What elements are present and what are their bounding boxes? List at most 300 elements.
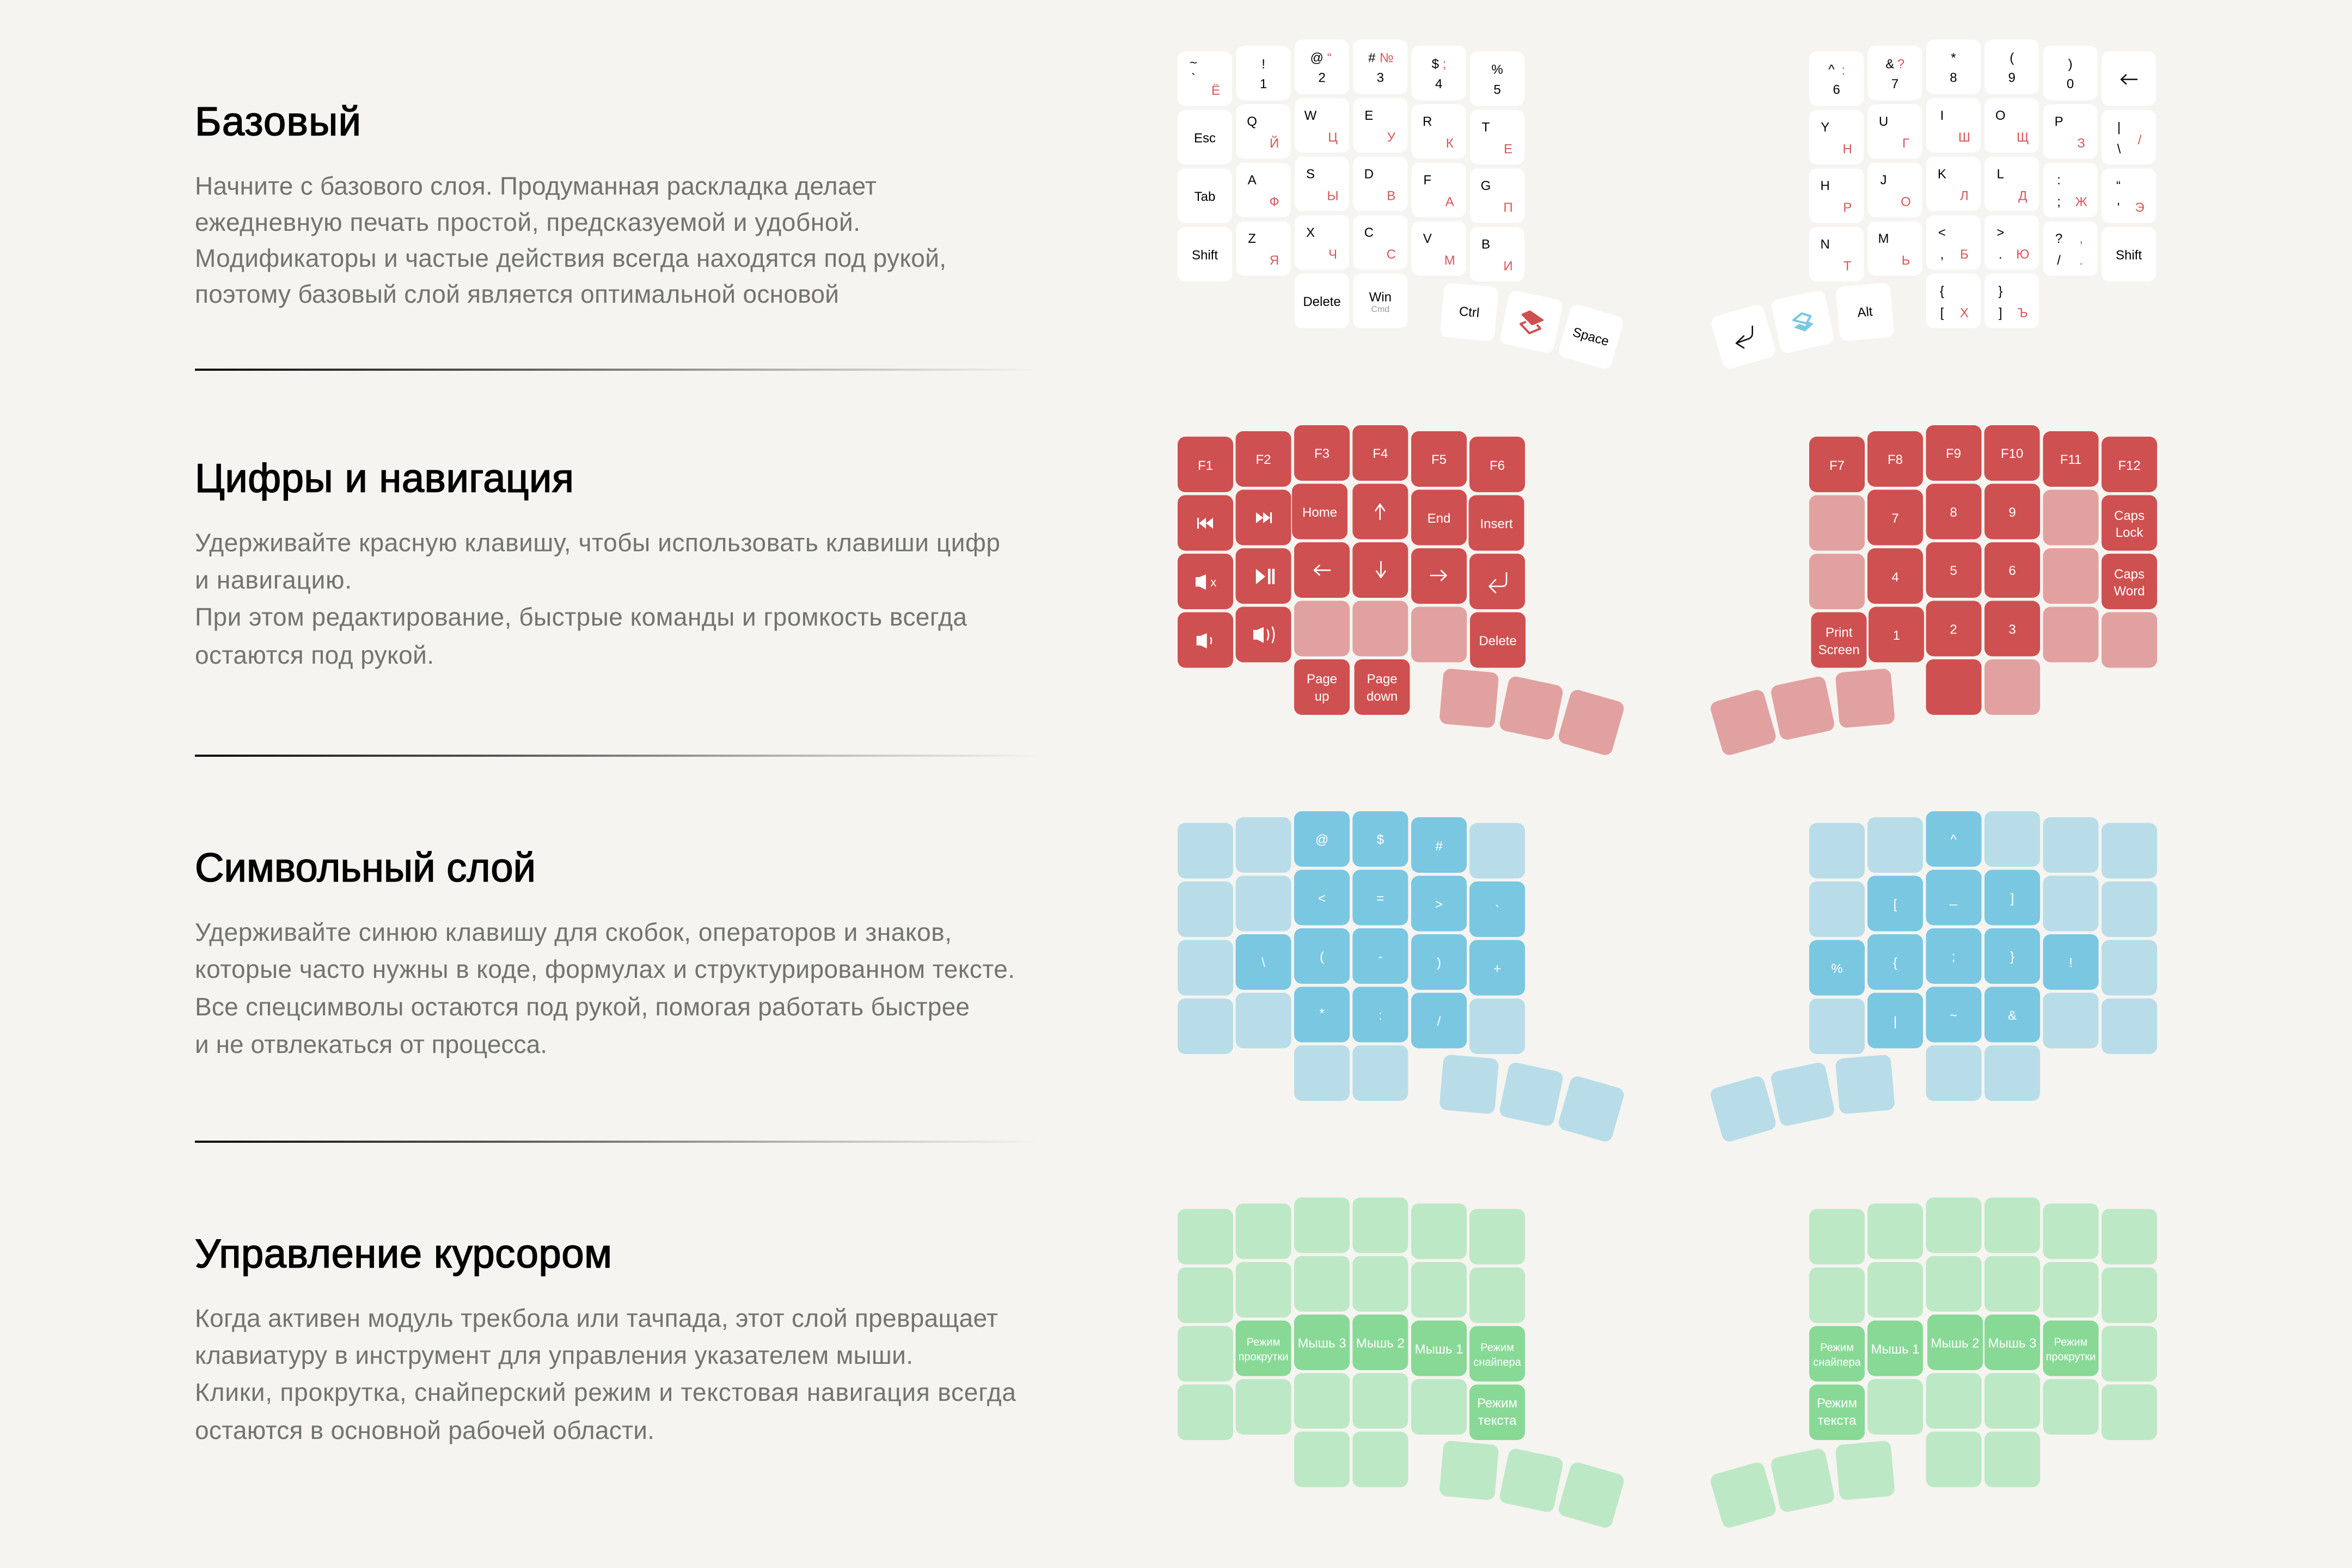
column 4 keys: D (1364, 167, 1374, 182)
key: blank active (1926, 659, 1982, 715)
key: text mode (1469, 1385, 1525, 1440)
column 2 keys: M (1878, 231, 1889, 246)
thumb key: Space (1557, 303, 1625, 370)
column 4 keys: > (1996, 225, 2004, 240)
text block: base layer: ежедневную печать простой, предсказуемой и удобной. (195, 208, 860, 236)
column 1 keys: Р (1843, 200, 1852, 215)
key: percent: % (1831, 961, 1843, 976)
column 3 keys: “ (1327, 51, 1332, 65)
key: mouse 3: Мышь 3 (1297, 1336, 1346, 1351)
column 3 keys: X (1306, 225, 1315, 240)
inactive keys: left hand (1178, 1198, 1626, 1529)
column 4 keys: С (1387, 247, 1396, 262)
key: F5 (1411, 431, 1467, 487)
key: F4: F4 (1373, 446, 1388, 461)
key: 7: 7 (1891, 511, 1899, 526)
column 2 keys: J (1881, 173, 1887, 187)
column 6 keys: П (1503, 200, 1513, 215)
key: F2: F2 (1255, 452, 1271, 467)
key: F12: F12 (2118, 458, 2141, 473)
column 4 keys (1984, 40, 2039, 328)
column 4 keys: O (1995, 108, 2006, 123)
key: close brace: } (2010, 950, 2014, 964)
key: sniper mode (1809, 1326, 1865, 1382)
column 2 keys: 1 (1260, 77, 1267, 91)
key: semicolon: ; (1952, 950, 1955, 964)
column 2 keys: U (1879, 114, 1888, 129)
column 2 keys: Й (1270, 136, 1279, 151)
key: colon: : (1379, 1008, 1382, 1023)
text block: symbol layer: Все спецсимволы остаются под рукой, помогая работать быстрее (195, 993, 970, 1021)
key: sniper mode: Режим (1820, 1342, 1854, 1353)
key: ampersand: & (2008, 1008, 2017, 1023)
column 5 keys: ? (2055, 231, 2062, 246)
key: caret (1926, 811, 1982, 867)
key: close parenthesis (1411, 934, 1467, 990)
key: Page up: up (1315, 689, 1329, 704)
key: open bracket: [ (1894, 897, 1897, 912)
text block: cursor layer: клавиатуру в инструмент для управления указателем мыши. (195, 1341, 913, 1369)
key: F9 (1926, 425, 1982, 481)
key: text mode: Режим (1817, 1396, 1857, 1411)
column 3 keys: Л (1960, 188, 1969, 204)
column 3 keys: K (1938, 167, 1946, 182)
key: close bracket (1984, 870, 2040, 926)
key: 6: 6 (2008, 564, 2016, 578)
column 4 keys: E (1364, 108, 1373, 123)
column 3 keys: Б (1960, 247, 1969, 262)
key: F12 (2102, 437, 2157, 492)
key: caret: ^ (1950, 832, 1957, 847)
column 4 keys: # (1368, 51, 1376, 65)
text block: number layer: и навигацию. (195, 566, 352, 594)
column 5 keys: / (2057, 253, 2061, 268)
heading: Управление курсором: Управление курсором (195, 1231, 612, 1276)
key: colon (1352, 987, 1408, 1042)
key: F5: F5 (1431, 452, 1447, 467)
column 5 keys (2043, 46, 2098, 275)
column 6 keys: T (1482, 120, 1490, 135)
key: 1: 1 (1893, 628, 1900, 643)
column 2 keys: 7 (1891, 77, 1898, 91)
key: less than (1294, 870, 1350, 926)
key: Caps Word: Caps (2114, 567, 2145, 582)
key: open brace: { (1893, 955, 1897, 970)
column 4 keys: . (1999, 247, 2002, 262)
key: F1: F1 (1198, 458, 1213, 473)
text block: symbol layer (195, 918, 1015, 1058)
key: Caps Lock: Caps (2114, 509, 2145, 523)
column 5 keys: R (1423, 114, 1432, 129)
key: F8 (1867, 431, 1923, 487)
column 6 keys: Shift (2116, 248, 2142, 262)
keyboard: symbol layer right hand (1709, 811, 2157, 1143)
column 5 keys: V (1423, 231, 1432, 246)
icon key: left arrow (1294, 542, 1350, 598)
column 5 keys: З (2077, 136, 2085, 151)
key: F9: F9 (1946, 446, 1961, 461)
column 3 keys: I (1940, 108, 1944, 123)
key: Page down: down (1367, 689, 1398, 704)
key: text mode (1809, 1385, 1865, 1440)
text block: base layer: Модификаторы и частые действия всегда находятся под рукой, (195, 244, 946, 272)
key: backtick (1469, 881, 1525, 937)
column 5 keys: . (2079, 253, 2083, 268)
key: F11: F11 (2060, 452, 2081, 467)
column 4 keys: C (1364, 225, 1374, 240)
column 5 keys: , (2079, 231, 2083, 246)
column 1 keys: ~ (1190, 56, 1197, 70)
column 1 keys: Ё (1211, 83, 1220, 98)
key: less than: < (1318, 891, 1326, 906)
icon key: right arrow (1411, 548, 1467, 604)
key: hyphen (1352, 928, 1408, 984)
column 5 keys: К (1446, 136, 1454, 151)
text block: number layer: остаются под рукой. (195, 641, 434, 669)
key: End (1411, 490, 1467, 546)
key: Page up: Page (1307, 672, 1337, 687)
text block: number layer (195, 528, 1000, 669)
column 2 keys: & (1885, 57, 1894, 72)
key: backtick: ` (1495, 903, 1499, 918)
column 2 keys: A (1248, 173, 1257, 187)
key: asterisk (1294, 987, 1350, 1042)
key: Caps Lock (2102, 495, 2157, 551)
column 6 keys: 5 (1493, 83, 1501, 97)
column 1 keys (1809, 51, 1864, 281)
key: ampersand (1984, 987, 2040, 1042)
column 5 keys: ) (2068, 57, 2073, 72)
thumb key: Enter arrow (1710, 303, 1777, 370)
column 6 keys: B (1481, 237, 1490, 252)
column 4 keys: 9 (2008, 71, 2016, 85)
key: close bracket: ] (2011, 891, 2014, 906)
icon key: next track (1236, 490, 1291, 546)
column 2 keys: Ф (1269, 195, 1279, 209)
key: sniper mode: Режим (1480, 1342, 1514, 1353)
column 3 keys: 8 (1950, 71, 1957, 85)
key: sniper mode: снайпера (1813, 1357, 1861, 1369)
key: F6: F6 (1490, 458, 1505, 473)
key: mouse 1: Мышь 1 (1414, 1342, 1463, 1357)
column 4 keys: } (1998, 284, 2002, 298)
column 5 keys: F (1423, 173, 1431, 187)
text block: cursor layer: Клики, прокрутка, снайперский режим и текстовая навигация всегда (195, 1378, 1016, 1406)
inactive keys: right hand (1809, 490, 2157, 715)
key: F4 (1352, 425, 1408, 481)
key: End: End (1428, 511, 1450, 526)
column 2 keys: О (1901, 195, 1911, 209)
key: Caps Word (2102, 554, 2157, 609)
inactive keys: right hand (1709, 811, 2157, 1143)
key: F11 (2043, 431, 2098, 487)
column 5 keys: $ (1432, 57, 1439, 72)
column 6 keys: / (2138, 133, 2142, 148)
column 3 keys: { (1940, 284, 1944, 298)
key: Page down: Page (1367, 672, 1398, 687)
key: open brace (1867, 934, 1923, 990)
panel: base layer description (195, 99, 946, 308)
key: open parenthesis: ( (1320, 950, 1324, 964)
key: F7: F7 (1829, 458, 1845, 473)
key: scroll mode: прокрутки (2046, 1351, 2096, 1363)
key: mouse 3 (1984, 1314, 2040, 1370)
key: mouse 2 (1352, 1314, 1408, 1370)
key: Insert: Insert (1480, 517, 1513, 531)
column 4 keys: 3 (1377, 71, 1384, 85)
key: slash: / (1437, 1014, 1441, 1029)
key: hash: # (1435, 839, 1443, 854)
key: mouse 1 (1867, 1321, 1923, 1376)
column 5 keys: : (2057, 173, 2061, 187)
panel: number and navigation layer description (195, 455, 1000, 669)
column 6 keys (1470, 51, 1524, 281)
text block: base layer (195, 172, 946, 308)
column 4 keys: Win (1369, 290, 1392, 305)
column 4 keys: ( (2010, 51, 2014, 65)
column 4 keys: ] (1999, 306, 2002, 320)
thumb key: red layer switch icon (1499, 290, 1564, 354)
column 5 keys (1412, 46, 1466, 275)
key: Home (1292, 483, 1347, 539)
column 3 keys: S (1306, 167, 1315, 182)
column 3 keys: Ш (1958, 130, 1970, 145)
icon key: mute: x (1210, 575, 1216, 589)
key: Delete: Delete (1479, 634, 1517, 648)
key: mouse 2 (1927, 1314, 1983, 1370)
key: dollar: $ (1377, 832, 1384, 847)
key: 8 (1926, 483, 1982, 539)
key: equals (1352, 870, 1408, 926)
key: 4: 4 (1891, 570, 1899, 585)
panel: symbol layer description (195, 845, 1015, 1058)
key: sniper mode (1469, 1326, 1525, 1382)
keyboard: cursor layer left hand (1178, 1198, 1626, 1529)
column 5 keys: 0 (2067, 77, 2074, 91)
key: scroll mode: Режим (1247, 1336, 1280, 1348)
column 2 keys (1867, 46, 1922, 275)
inactive keys: left hand (1178, 817, 1626, 1143)
key: plus (1469, 940, 1525, 995)
column 6 keys: | (2117, 120, 2121, 135)
keyboard: base layer left hand (1178, 40, 1625, 370)
key: hash (1411, 817, 1467, 873)
column 3 keys: Ч (1328, 247, 1337, 262)
key: mouse 2: Мышь 2 (1931, 1336, 1980, 1351)
thumb key: Ctrl (1440, 283, 1499, 341)
key: Print Screen: Print (1826, 626, 1853, 640)
key: Home: Home (1302, 505, 1337, 520)
column 2 keys: Ь (1902, 253, 1910, 268)
column 5 keys: ; (1443, 57, 1446, 72)
key: hyphen: - (1378, 950, 1382, 964)
column 1 keys: Tab (1195, 189, 1215, 204)
column 3 keys: @ (1310, 51, 1324, 65)
key: F6 (1469, 437, 1525, 492)
column 2 keys: Z (1248, 231, 1256, 246)
column 4 keys: У (1387, 130, 1396, 145)
column 6 keys: Э (2135, 200, 2145, 215)
column 1 keys: Y (1821, 120, 1829, 135)
key: scroll mode: прокрутки (1239, 1351, 1288, 1363)
text block: cursor layer: остаются в основной рабочей области. (195, 1416, 654, 1444)
column 1 keys: ^ (1828, 62, 1835, 77)
inactive keys: right hand (1709, 1198, 2157, 1529)
icon key: volume down (1178, 612, 1233, 667)
column 1 keys: : (1841, 63, 1845, 78)
key: F2 (1236, 431, 1291, 487)
key: 3: 3 (2008, 622, 2016, 637)
key: underscore: _ (1949, 891, 1957, 906)
key: semicolon (1926, 928, 1982, 984)
keyboard: cursor layer right hand (1709, 1198, 2157, 1529)
key: Print Screen: Screen (1818, 642, 1860, 658)
column 4 keys: Cmd (1371, 305, 1389, 314)
key: F10: F10 (2001, 446, 2023, 461)
text block: cursor layer (195, 1304, 1016, 1444)
key: Print Screen (1811, 612, 1866, 667)
heading: Цифры и навигация: Цифры и навигация (195, 455, 574, 501)
column 6 keys (2102, 51, 2156, 281)
column 4 keys (1353, 40, 1407, 328)
inactive thumb keys: left hand (1439, 668, 1626, 757)
icon key: up arrow (1352, 483, 1408, 539)
column 4 keys: Ю (2016, 247, 2029, 262)
key: Page down (1355, 659, 1410, 715)
column 1 keys (1178, 51, 1232, 281)
key: Page up (1294, 659, 1350, 715)
key: 8: 8 (1950, 505, 1957, 520)
column 5 keys: М (1444, 253, 1455, 268)
text block: symbol layer: и не отвлекаться от процесса. (195, 1030, 547, 1058)
key: F8: F8 (1888, 452, 1903, 467)
column 3 keys: Ы (1327, 188, 1339, 204)
key: greater than: > (1435, 897, 1443, 912)
column 2 keys: Я (1270, 253, 1279, 268)
thumb key: blue layer switch icon (1771, 290, 1835, 354)
icon key: previous track (1178, 495, 1233, 551)
column 6 keys: % (1491, 62, 1503, 77)
key: backslash: \ (1261, 955, 1265, 970)
key: F10 (1984, 425, 2039, 481)
column 2 keys: Q (1247, 114, 1257, 129)
column 3 keys (1295, 40, 1349, 328)
text block: base layer: Начните с базового слоя. Продуманная раскладка делает (195, 172, 877, 200)
key: exclamation mark (2043, 934, 2098, 990)
key: scroll mode (2043, 1321, 2098, 1376)
column 1 keys: Esc (1194, 131, 1216, 146)
key: text mode: текста (1818, 1413, 1857, 1428)
key: mouse 3 (1294, 1314, 1350, 1370)
column 5 keys: P (2055, 114, 2063, 129)
key: open parenthesis (1294, 928, 1350, 984)
column 6 keys: G (1481, 179, 1491, 193)
keyboard: base layer right hand (1710, 40, 2156, 370)
icon key: down arrow (1352, 542, 1408, 598)
text block: symbol layer: которые часто нужны в коде, формулах и структурированном тексте. (195, 955, 1015, 983)
column 4 keys: Д (2018, 188, 2027, 204)
column 3 keys: 2 (1318, 71, 1326, 85)
key: underscore (1926, 870, 1982, 926)
inactive keys: left hand (1294, 601, 1467, 662)
column 3 keys (1926, 40, 1981, 328)
text block: number layer: При этом редактирование, быстрые команды и громкость всегда (195, 603, 967, 631)
column 6 keys: И (1503, 259, 1513, 273)
keyboard: numbers and navigation right hand (1709, 425, 2157, 757)
column 3 keys: < (1938, 225, 1946, 240)
key: 5 (1926, 542, 1982, 598)
thumb key: Space: Space (1571, 325, 1610, 349)
key: Insert (1469, 495, 1524, 551)
column 5 keys: 4 (1435, 77, 1442, 91)
key: F1 (1178, 437, 1233, 492)
key: at sign (1294, 811, 1350, 867)
text block: symbol layer: Удерживайте синюю клавишу для скобок, операторов и знаков, (195, 918, 952, 946)
key: 2 (1926, 601, 1982, 657)
key: sniper mode: снайпера (1473, 1357, 1522, 1369)
key: 9 (1984, 483, 2040, 539)
column 4 keys: № (1380, 51, 1394, 65)
column 5 keys: А (1445, 195, 1454, 209)
key: tilde (1926, 987, 1982, 1042)
key: pipe (1867, 993, 1923, 1049)
column 2 keys: Г (1902, 136, 1909, 151)
key: open bracket (1867, 875, 1923, 931)
key: 6 (1984, 542, 2040, 598)
key: F3 (1294, 425, 1350, 481)
column 2 keys: ? (1897, 57, 1904, 72)
inactive thumb keys: right hand (1709, 668, 1895, 757)
key: scroll mode: Режим (2054, 1336, 2087, 1348)
key: at sign: @ (1315, 832, 1328, 847)
column 3 keys: * (1951, 51, 1956, 65)
key: backslash (1236, 934, 1291, 990)
key: 2: 2 (1950, 622, 1957, 637)
key: F7 (1809, 437, 1865, 492)
icon key: enter arrow (1469, 554, 1525, 609)
key: 3 (1984, 601, 2040, 657)
column 2 keys (1236, 46, 1291, 275)
key: slash (1411, 993, 1467, 1049)
key: 9: 9 (2008, 505, 2016, 520)
keyboard: numbers and navigation left hand (1178, 425, 1626, 757)
key: text mode: текста (1478, 1413, 1517, 1428)
key: tilde: ~ (1950, 1008, 1957, 1023)
column 4 keys: L (1997, 167, 2004, 182)
column 2 keys: ! (1261, 57, 1265, 72)
column 1 keys: N (1821, 237, 1830, 252)
column 1 keys: 6 (1833, 83, 1840, 97)
key: 7 (1867, 490, 1923, 546)
column 6 keys: Е (1504, 142, 1512, 157)
key: percent (1809, 940, 1865, 995)
column 3 keys: Ц (1328, 130, 1338, 145)
column 1 keys: Н (1843, 142, 1852, 157)
column 3 keys: , (1940, 247, 1944, 262)
key: mouse 3: Мышь 3 (1988, 1336, 2037, 1351)
thumb key: Ctrl: Ctrl (1459, 304, 1480, 321)
icon key: volume up (1236, 607, 1291, 662)
text block: number layer: Удерживайте красную клавишу, чтобы использовать клавиши цифр (195, 528, 1000, 556)
key: Caps Word: Word (2114, 584, 2145, 599)
column 1 keys: H (1821, 179, 1830, 193)
key: Delete (1470, 612, 1526, 667)
column 3 keys: W (1304, 108, 1317, 123)
key: exclamation mark: ! (2069, 955, 2073, 970)
column 4 keys: В (1387, 188, 1395, 204)
column 1 keys: ` (1191, 71, 1196, 86)
key: Caps Lock: Lock (2116, 525, 2143, 540)
